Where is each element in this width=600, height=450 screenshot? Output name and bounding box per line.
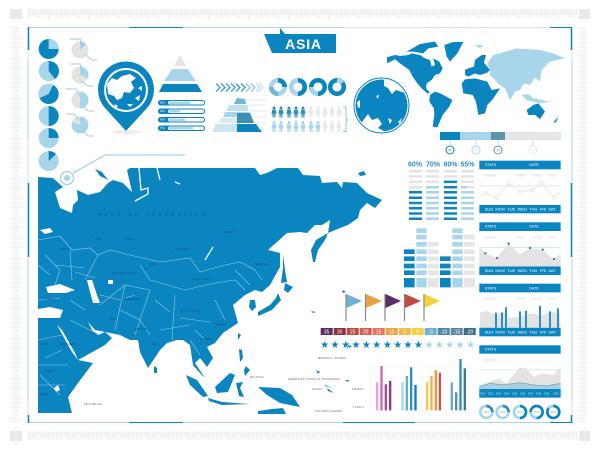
star rating: ★ (425, 340, 434, 351)
stats chart 4: stacked area: 2012 (488, 393, 494, 395)
pie column: blue pies (39, 39, 59, 171)
city and country small labels: Perm (95, 238, 101, 241)
new zealand (553, 117, 558, 122)
stats chart 3: bars: TUE (507, 329, 516, 334)
sumatra (186, 375, 208, 397)
main map of Asia: MALAYSIA (250, 376, 264, 379)
main map of Asia: KIRIBATI (352, 388, 364, 391)
main map of Asia: SEYCHELLES (84, 403, 103, 406)
north america (387, 53, 443, 93)
temperature scale: 35 (324, 330, 330, 336)
stats chart 1: line: DATE (529, 163, 539, 167)
stats chart 2: area: FRI (540, 268, 546, 273)
country labels (98, 213, 213, 313)
world map legend: 04 (531, 148, 535, 152)
percentage donuts: 25% (500, 410, 506, 414)
star rating: ★ (445, 340, 454, 351)
stats chart 1: line: SAT (548, 207, 556, 212)
city and country small labels: Tyumen (125, 238, 135, 241)
temperature scale: 30 (337, 330, 343, 336)
stats chart 1: line: MON (495, 207, 505, 212)
temperature scale: -20 (466, 330, 474, 336)
city and country small labels: EGYPT (40, 343, 49, 346)
star rating: ★ (331, 340, 340, 351)
percentage donuts (480, 406, 559, 418)
city and country small labels: TURKEY (45, 298, 55, 301)
city and country small labels: Krasnoyarsk (175, 248, 190, 251)
stats chart 4: stacked area: 2018 (536, 393, 542, 395)
pill progress bars: 30% (160, 110, 166, 113)
sri lanka (154, 366, 157, 373)
percentage donuts: 90% (550, 410, 557, 414)
novaya zemlya (95, 169, 108, 180)
africa (462, 78, 500, 115)
donut segments row (271, 80, 344, 94)
star rating: ★ (435, 340, 444, 351)
temperature scale (321, 328, 476, 336)
mainland (38, 168, 382, 413)
stats chart 3: bars: SAT (548, 329, 556, 334)
stats chart 3: bars: FRI (540, 329, 546, 334)
country labels: KAZAKHSTAN (112, 272, 138, 275)
europe (465, 55, 490, 77)
temperature scale: 15 (376, 330, 382, 336)
stats chart 1: line: FRI (540, 207, 546, 212)
temperature scale: -5 (428, 330, 433, 336)
country labels: MONGOLIA (192, 278, 213, 281)
main map of Asia: FEDERATED STATES OF MICRONESIA (288, 378, 340, 381)
temperature scale: 25 (350, 330, 356, 336)
stats chart 3: bars: WED (518, 329, 527, 334)
stats chart 3: bars: SUN (485, 329, 493, 334)
map marker and leader line (60, 155, 185, 184)
main map of Asia: MARSHALL ISLANDS (318, 357, 346, 360)
borders and rivers (38, 236, 262, 395)
temperature scale: -10 (440, 330, 448, 336)
city and country small labels: TURKMENISTAN (120, 298, 140, 301)
star rating: ★ (341, 340, 350, 351)
city and country small labels: Moscow (60, 248, 69, 251)
world map legend: 03 (496, 148, 500, 152)
southeast asia islands (522, 94, 550, 103)
northern gulfs (135, 168, 213, 260)
new siberian island (358, 171, 366, 176)
pill progress bars: 45% (160, 119, 166, 122)
city and country small labels: Shanghai (215, 323, 226, 326)
temperature scale: 5 (403, 330, 406, 336)
pill progress bars: 60% (160, 102, 166, 105)
percent LED columns (408, 162, 475, 220)
taiwan and philippines (238, 333, 250, 376)
title banner (264, 28, 336, 53)
grouped bar chart (370, 358, 473, 410)
star rating: ★ (393, 340, 402, 351)
stats chart 4: stacked area: STATS (485, 348, 497, 352)
sakhalin (281, 254, 287, 283)
star rating: ★ (404, 340, 413, 351)
percent LED columns: 70% (426, 162, 441, 168)
stats chart 1: line: THU (529, 207, 538, 212)
star rating: ★ (372, 340, 381, 351)
stats chart 2: area: SAT (548, 268, 556, 273)
stats chart 2: area: SUN (485, 268, 493, 273)
world map legend: 02 (474, 148, 478, 152)
percent LED columns: 55% (460, 162, 475, 168)
percentage donuts: 50% (517, 410, 523, 414)
star rating: ★ (383, 340, 392, 351)
pill progress bars (158, 100, 205, 131)
stats chart 1: line: SUN (485, 207, 493, 212)
temperature scale: 20 (363, 330, 369, 336)
stats chart 4: stacked area (479, 345, 561, 398)
kamchatka (311, 233, 328, 262)
stats chart 3: bars (479, 284, 561, 336)
stats chart 3: bars: THU (529, 329, 538, 334)
main map of Asia (38, 168, 382, 414)
city and country small labels: INDIA (150, 343, 157, 346)
percentage donuts: 25% (483, 410, 490, 414)
city and country small labels (40, 231, 269, 396)
star rating (320, 340, 475, 351)
flags (346, 294, 440, 321)
world map legend: 01 (448, 148, 452, 152)
stats chart 3: bars: STATS (485, 286, 497, 290)
japan (258, 283, 293, 316)
stats chart 4: stacked area: 2019 (544, 393, 550, 395)
percent LED columns: 60% (408, 162, 423, 168)
stats chart 4: stacked area: 2011 (480, 393, 486, 395)
stats chart 1: line (479, 161, 561, 213)
stats chart 4: stacked area: 2017 (528, 393, 534, 395)
south america (429, 92, 452, 127)
temperature scale: 0 (416, 330, 419, 336)
stats chart 4: stacked area: 2014 (504, 393, 510, 395)
main map of Asia: NAURU (312, 388, 322, 391)
frame (28, 27, 572, 423)
country labels: RUSSIAN FEDERATION (98, 213, 209, 217)
percent LED columns: 80% (444, 162, 458, 168)
city and country small labels: Khabarovsk (255, 263, 269, 266)
java and lesser sunda (208, 398, 250, 405)
stepped pyramid chart (212, 98, 266, 132)
stats chart 4: stacked area: 2020 (553, 393, 559, 395)
sulawesi (236, 382, 244, 397)
chevron arrows (216, 84, 263, 92)
stats chart 1: line: TUE (507, 207, 516, 212)
stats chart 2: area: DATE (529, 225, 539, 229)
stats chart 2: area: STATS (485, 225, 497, 229)
stats chart 2: area: THU (529, 268, 538, 273)
stats chart 4: stacked area: 2015 (512, 393, 518, 395)
temperature scale: 10 (389, 330, 395, 336)
stats chart 2: area: WED (518, 268, 527, 273)
greenland (444, 42, 463, 62)
star rating: ★ (456, 340, 465, 351)
country labels: CHINA (181, 309, 202, 313)
globe (354, 78, 409, 134)
stats chart 1: line: STATS (485, 163, 497, 167)
city and country small labels: SUDAN (45, 370, 54, 373)
city and country small labels: Yakutsk (225, 231, 234, 234)
star rating: ★ (320, 340, 329, 351)
inland seas (38, 228, 113, 392)
stats chart 1: line: WED (518, 207, 527, 212)
stats chart 2: area (479, 222, 561, 275)
equalizer bars (404, 228, 475, 287)
main map of Asia: TUVALU (353, 406, 364, 409)
world map legend (440, 132, 561, 154)
people icons (272, 106, 348, 132)
world map (387, 42, 565, 127)
city and country small labels: IRAN (110, 318, 116, 321)
iceland (475, 45, 483, 48)
arctic islands (407, 42, 438, 53)
star rating: ★ (414, 340, 423, 351)
pill progress bars: 75% (160, 127, 166, 130)
australia tip (258, 408, 286, 414)
location pin with globe (98, 61, 154, 134)
pyramid (159, 55, 202, 92)
percentage donuts: 75% (534, 410, 540, 414)
title banner: ASIA (285, 36, 322, 52)
star rating: ★ (466, 340, 475, 351)
city and country small labels: Omsk (150, 263, 157, 266)
asia (487, 48, 565, 100)
pacific islands (311, 290, 352, 393)
temperature scale: -15 (453, 330, 461, 336)
city and country small labels: MYANMAR (200, 338, 213, 341)
star rating: ★ (362, 340, 371, 351)
stats chart 2: area: TUE (507, 268, 516, 273)
stats chart 4: stacked area: 2013 (496, 393, 502, 395)
australia (527, 103, 545, 119)
stats chart 3: bars: MON (495, 329, 505, 334)
stats chart 2: area: MON (495, 268, 505, 273)
city and country small labels: SAUDI ARABIA (60, 343, 78, 346)
stats chart 3: bars: DATE (529, 286, 539, 290)
pie column: gray pies with connectors (66, 39, 97, 136)
borneo (215, 373, 235, 393)
new guinea (258, 387, 300, 407)
stats chart 4: stacked area: 2016 (520, 393, 526, 395)
city and country small labels: KENYA (40, 393, 49, 396)
city and country small labels: PAKISTAN (135, 328, 147, 331)
korea (249, 300, 256, 311)
main map of Asia: SOLOMON ISLANDS (315, 410, 342, 413)
star rating: ★ (352, 340, 361, 351)
